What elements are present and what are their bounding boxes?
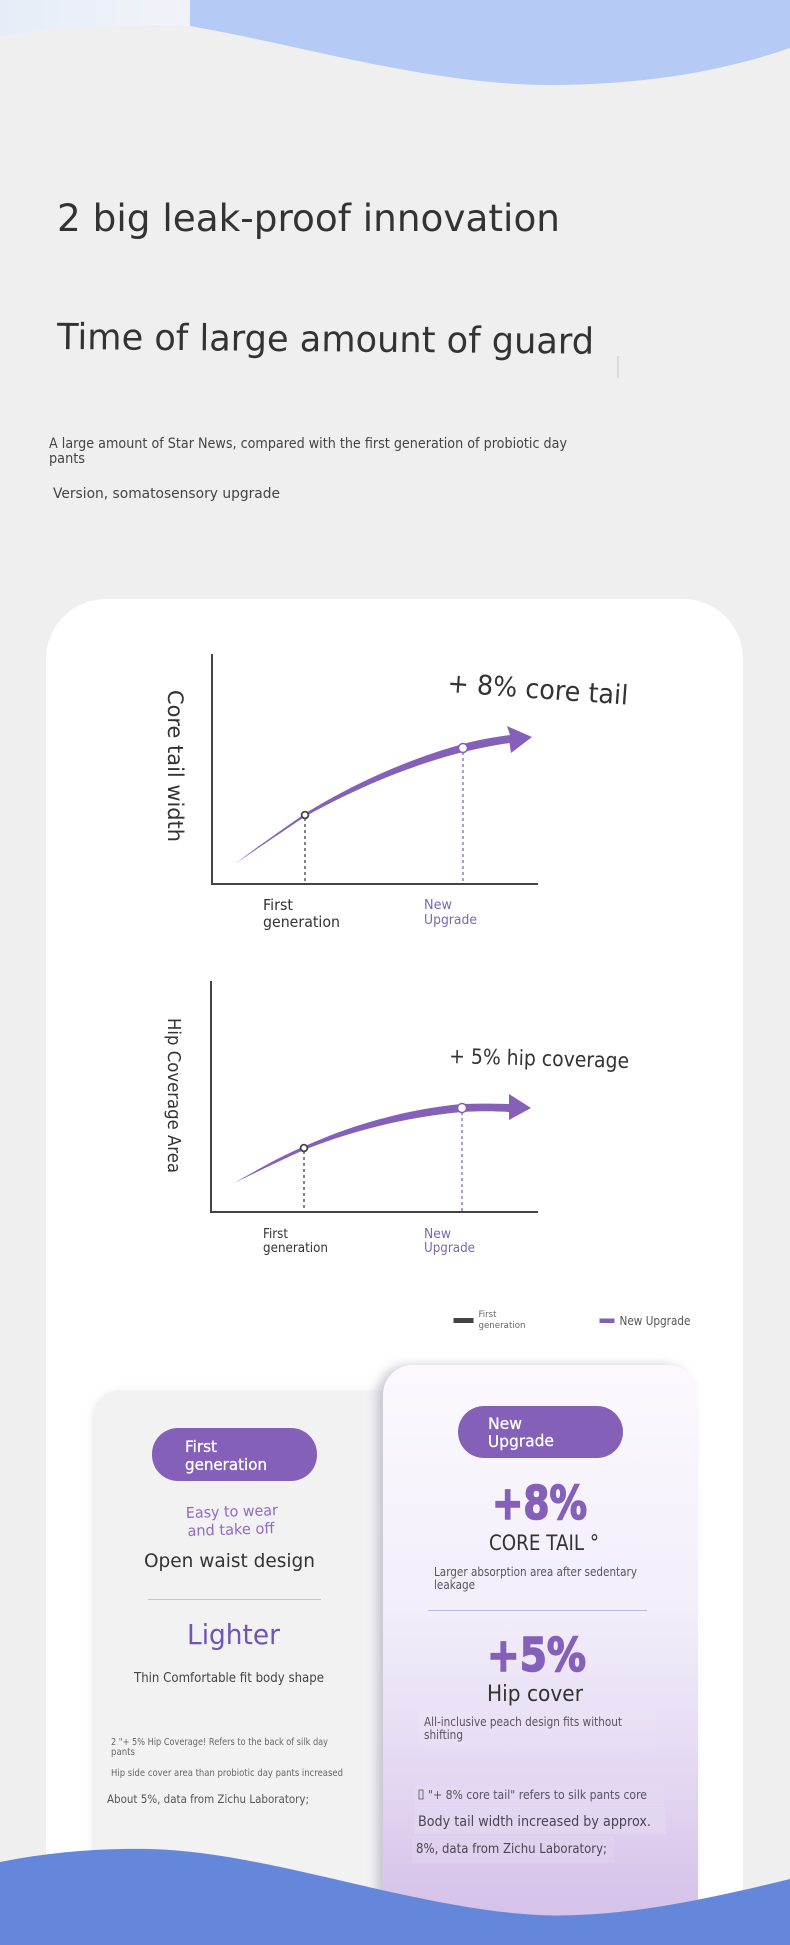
footnote (107, 1737, 343, 1806)
panel: white card (46, 599, 743, 1945)
footnote: "+ 8% core tail" refers to silk pants core (428, 1788, 647, 1802)
dotted guides (305, 752, 463, 884)
intro text: pants (49, 451, 85, 467)
pill: first generation: generation (185, 1455, 267, 1474)
hip cover: Hip cover (487, 1682, 584, 1707)
footnote: 2 "+ 5% Hip Coverage! Refers to the back of silk day (111, 1737, 328, 1748)
x label: first generation: First (263, 896, 293, 914)
axes (212, 654, 538, 884)
open waist design: Open waist design (144, 1550, 315, 1572)
x label: new upgrade (424, 898, 477, 928)
point: first generation (301, 1145, 307, 1151)
title: 2 big leak-proof innovation (57, 197, 560, 240)
x label: first generation (263, 1227, 328, 1256)
pill: new upgrade: Upgrade (488, 1431, 554, 1451)
intro text: A large amount of Star News, compared with the first generation of probiotic day (49, 436, 567, 452)
intro text: Version, somatosensory upgrade (53, 486, 280, 502)
hip cover description (418, 1711, 656, 1745)
x label: first generation: First (263, 1227, 288, 1242)
point: first generation (302, 812, 308, 818)
growth arrow (235, 726, 532, 864)
point: new upgrade (458, 1104, 466, 1112)
pill: new upgrade (458, 1406, 623, 1458)
x label: first generation: generation (263, 913, 340, 931)
footnote: About 5%, data from Zichu Laboratory; (107, 1792, 309, 1806)
footnote: Hip side cover area than probiotic day pants increased (111, 1768, 343, 1779)
pill: new upgrade: New (488, 1414, 522, 1433)
x label: new upgrade: Upgrade (424, 1241, 475, 1256)
hip cover description: All-inclusive peach design fits without (424, 1715, 622, 1729)
pill: first generation: First (185, 1437, 217, 1456)
title (56, 197, 594, 363)
panel: first generation (92, 1390, 422, 1945)
chart: core tail width (163, 654, 629, 931)
footnote: pants (111, 1747, 135, 1758)
core tail description: Larger absorption area after sedentary (434, 1565, 637, 1579)
core tail description (434, 1565, 637, 1592)
core tail description: leakage (434, 1578, 475, 1592)
footnote: 8%, data from Zichu Laboratory; (416, 1842, 607, 1857)
dotted guides (304, 1112, 462, 1212)
legend: New Upgrade (620, 1314, 690, 1328)
legend: First (478, 1310, 497, 1320)
lighter: Lighter (187, 1618, 280, 1651)
panel: new upgrade (383, 1365, 698, 1945)
footnote: Body tail width increased by approx. (418, 1814, 651, 1830)
core tail: CORE TAIL ° (489, 1531, 599, 1555)
hip cover description: shifting (424, 1728, 463, 1742)
easy to wear (186, 1501, 279, 1540)
x label: new upgrade: New (424, 1227, 451, 1242)
small vertical mark (618, 356, 619, 378)
x label: first generation (263, 896, 340, 931)
axes (211, 981, 538, 1212)
x label: new upgrade: New (424, 898, 452, 913)
title: Time of large amount of guard (56, 317, 594, 363)
easy to wear: Easy to wear (186, 1501, 279, 1522)
growth arrow (234, 1094, 531, 1183)
point: new upgrade (458, 744, 468, 752)
bottom wave (0, 1849, 790, 1945)
footnote (412, 1786, 666, 1863)
legend: generation (478, 1321, 526, 1331)
intro text (49, 436, 567, 502)
thin comfortable: Thin Comfortable fit body shape (133, 1671, 324, 1686)
y axis label: Core tail width (163, 690, 187, 842)
callout: + 5% hip coverage (449, 1044, 629, 1073)
stat: +5%: +5% (487, 1628, 586, 1682)
pill: first generation (152, 1428, 317, 1481)
legend (454, 1310, 690, 1331)
stat: +8%: +8% (492, 1476, 587, 1530)
y axis label: Hip Coverage Area (163, 1018, 184, 1173)
chart: hip coverage area (163, 981, 629, 1256)
callout: + 8% core tail (447, 668, 629, 712)
easy to wear: and take off (187, 1519, 275, 1540)
x label: new upgrade (424, 1227, 475, 1256)
top wave (0, 0, 790, 85)
x label: new upgrade: Upgrade (424, 913, 477, 928)
x label: first generation: generation (263, 1241, 328, 1256)
